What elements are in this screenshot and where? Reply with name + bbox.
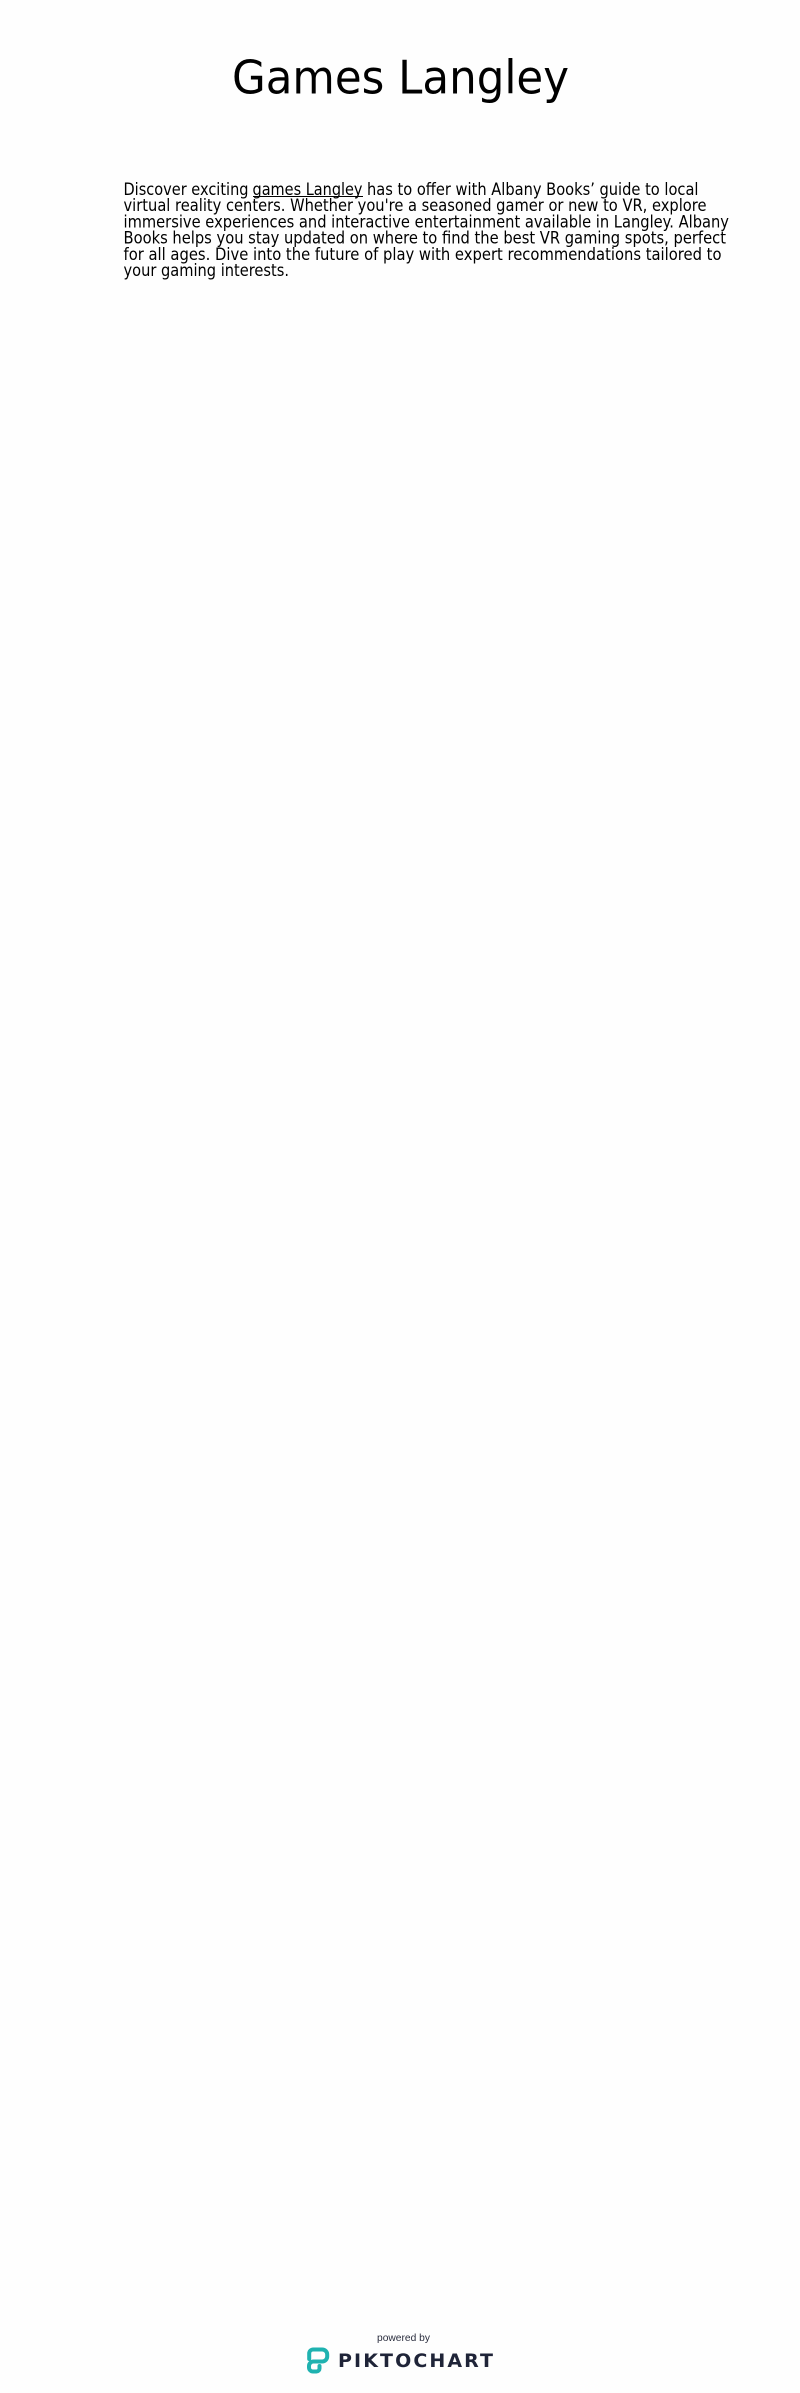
intro paragraph: virtual reality centers. Whether you're a seasoned gamer or new to VR, explore [124,196,706,216]
intro paragraph: your gaming interests. [124,261,289,281]
powered by label: powered by [377,2333,430,2344]
icon: Piktochart logo mark [309,2350,327,2372]
wordmark: PIKTOCHART [338,2350,493,2372]
intro paragraph [124,180,729,281]
first line with underlined link [124,180,698,200]
first line with underlined link: Discover exciting [124,180,248,200]
first line with underlined link: has to offer with Albany Books’ guide to local [367,180,698,200]
footer: powered by Piktochart [309,2333,493,2372]
first line with underlined link: games Langley [252,180,362,200]
intro paragraph: for all ages. Dive into the future of play with expert recommendations tailored to [124,245,722,265]
title: Games Langley [232,50,569,104]
intro paragraph: Books helps you stay updated on where to find the best VR gaming spots, perfect [124,229,726,249]
